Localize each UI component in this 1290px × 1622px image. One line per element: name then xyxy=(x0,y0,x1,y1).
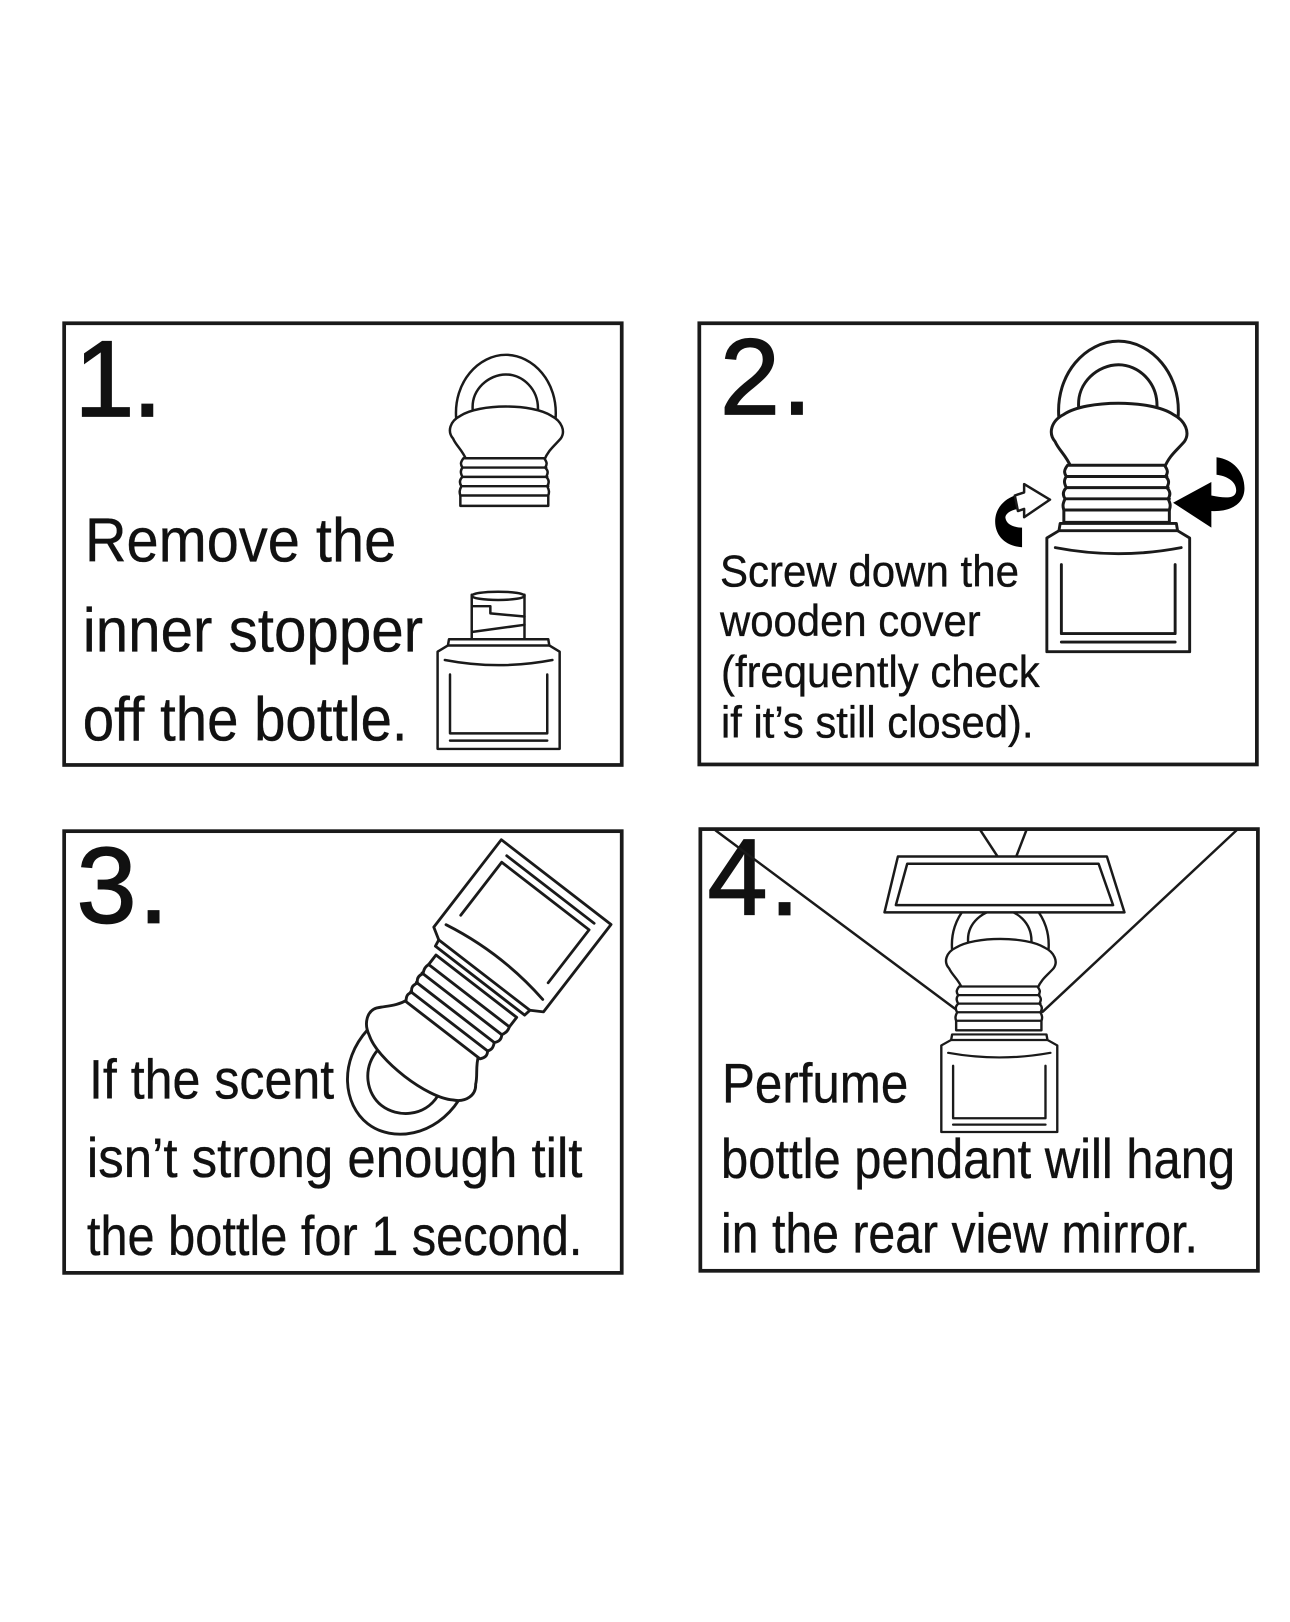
panel 3 instruction text xyxy=(87,1048,583,1267)
panel 4: hang in the rear view mirror xyxy=(700,817,1258,1271)
icon: black rotation arrow xyxy=(1173,457,1244,528)
step number 4: 4. xyxy=(708,817,800,937)
panel 4 frame xyxy=(700,829,1258,1271)
step number 1: 1. xyxy=(75,319,162,439)
panel 4 instruction text: Perfume xyxy=(722,1052,908,1115)
panel 3 instruction text: the bottle for 1 second. xyxy=(87,1204,582,1267)
panel 1 instruction text: off the bottle. xyxy=(83,686,408,755)
panel 1 instruction text: Remove the xyxy=(85,507,396,576)
panel 2 instruction text: Screw down the xyxy=(720,548,1019,597)
icon: pendant strings xyxy=(716,831,1236,1012)
panel 2 instruction text: wooden cover xyxy=(719,597,981,646)
icon: white rotation arrow xyxy=(995,484,1050,547)
panel 2 instruction text: if it’s still closed). xyxy=(721,699,1033,748)
icon: closed bottle with cover xyxy=(1047,341,1190,652)
panel 3 instruction text: isn’t strong enough tilt xyxy=(87,1126,583,1189)
icon: rear view mirror xyxy=(884,831,1124,912)
panel 3 frame xyxy=(64,831,622,1273)
panel 1: remove the inner stopper xyxy=(64,319,622,765)
panel 2 frame xyxy=(699,323,1257,764)
panel 4 instruction text xyxy=(721,1052,1235,1265)
panel 2 instruction text: (frequently check xyxy=(721,648,1040,697)
panel 1 instruction text: inner stopper xyxy=(83,597,423,666)
step number 3: 3. xyxy=(77,826,169,946)
panel 2 instruction text xyxy=(719,548,1040,748)
step number 2: 2. xyxy=(720,317,812,437)
panel 1 instruction text xyxy=(83,507,423,755)
panel 1 frame xyxy=(64,323,622,765)
icon: open bottle with neck xyxy=(438,592,560,749)
panel 2: screw down the wooden cover xyxy=(699,317,1257,764)
panel 4 instruction text: in the rear view mirror. xyxy=(721,1202,1198,1265)
icon: removed stopper xyxy=(450,355,563,506)
icon: tilted bottle with cover xyxy=(315,840,611,1163)
icon: hanging bottle pendant xyxy=(941,891,1057,1132)
panel 3: tilt the bottle xyxy=(64,826,622,1273)
panel 3 instruction text: If the scent xyxy=(89,1048,335,1111)
